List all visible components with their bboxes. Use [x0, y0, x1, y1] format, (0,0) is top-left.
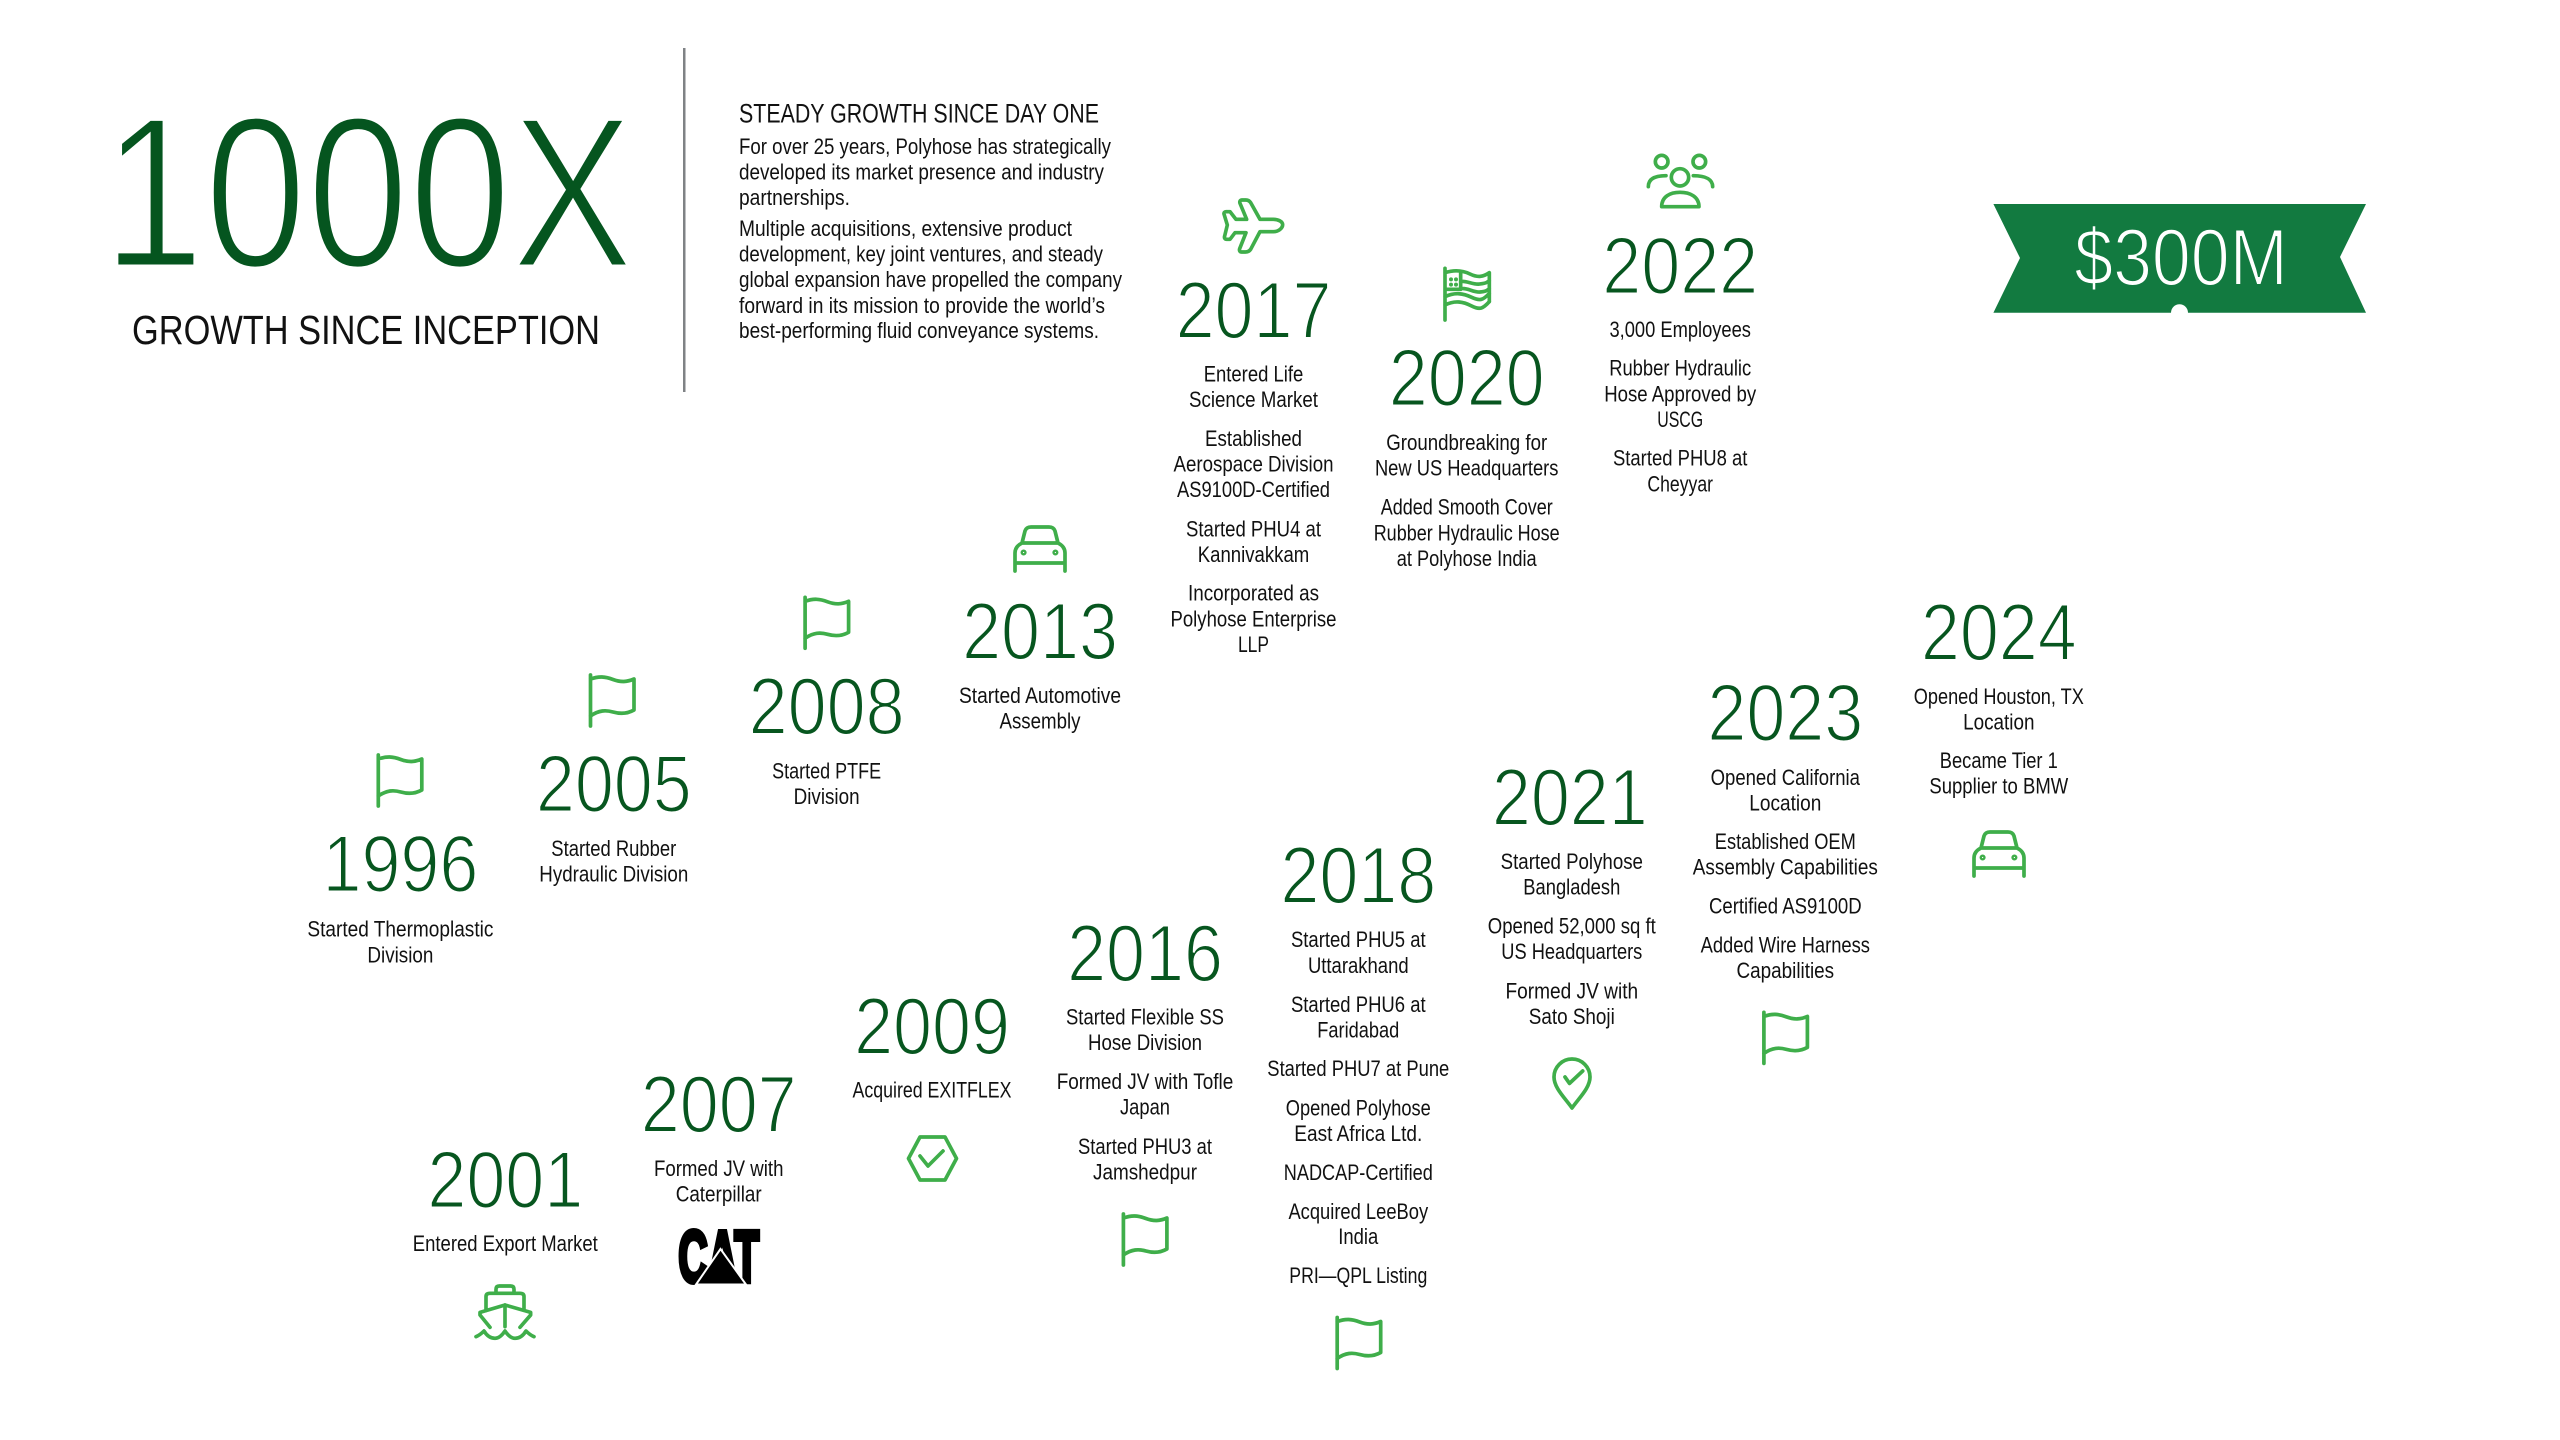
milestone 2023: Established OEM — [1715, 829, 1856, 854]
icon: ship — [476, 1286, 534, 1338]
year 2005: 2005 — [536, 739, 692, 830]
milestone 2024: Became Tier 1 — [1940, 748, 2058, 773]
milestone 2020: Groundbreaking for — [1386, 430, 1547, 455]
milestone 2013 — [959, 527, 1121, 734]
intro text block: development, key joint ventures, and steady — [739, 242, 1103, 267]
milestone 2023: Capabilities — [1736, 958, 1834, 983]
year 2013: 2013 — [962, 586, 1118, 677]
icon: location pin check — [1554, 1059, 1590, 1108]
intro text block — [739, 98, 1122, 343]
icon: US flag — [1445, 268, 1489, 320]
milestone 2013: Assembly — [1000, 709, 1080, 734]
milestone 2022: Cheyyar — [1647, 471, 1713, 496]
year 2024: 2024 — [1921, 587, 2077, 678]
milestone 2022: Started PHU8 at — [1613, 446, 1747, 471]
icon: car — [1974, 832, 2024, 876]
milestone 2016: Started PHU3 at — [1078, 1134, 1212, 1159]
milestone 2018: Acquired LeeBoy — [1288, 1199, 1428, 1224]
milestone 2023: Opened California — [1711, 765, 1861, 790]
milestone 2013: Started Automotive — [959, 683, 1121, 708]
milestone 2018: PRI—QPL Listing — [1289, 1263, 1427, 1288]
milestone 2021: Formed JV with — [1505, 978, 1638, 1003]
milestone 2018: Opened Polyhose — [1286, 1095, 1431, 1120]
milestone 2020: Rubber Hydraulic Hose — [1374, 520, 1560, 545]
vertical divider — [683, 48, 686, 392]
icon: flag — [378, 755, 422, 806]
milestone 2021: Bangladesh — [1523, 874, 1620, 899]
milestone 1996: Division — [367, 942, 433, 967]
year 2020: 2020 — [1389, 333, 1545, 424]
icon: airplane — [1224, 200, 1283, 252]
milestone 2024 — [1914, 587, 2084, 876]
milestone 2018: Started PHU6 at — [1291, 992, 1426, 1017]
milestone 2022: Rubber Hydraulic — [1609, 356, 1751, 381]
year 2008: 2008 — [749, 661, 905, 752]
milestone 2005: Hydraulic Division — [539, 862, 688, 887]
milestone 2021: Opened 52,000 sq ft — [1488, 914, 1656, 939]
milestone 2005: Started Rubber — [551, 836, 676, 861]
milestone 2016: Formed JV with Tofle — [1057, 1069, 1233, 1094]
milestone 2018 — [1267, 830, 1449, 1368]
icon: flag — [1337, 1318, 1381, 1368]
milestone 2007 — [641, 1059, 797, 1298]
intro heading: STEADY GROWTH SINCE DAY ONE — [739, 98, 1099, 128]
milestone 2020: at Polyhose India — [1397, 546, 1537, 571]
intro text block: partnerships. — [739, 185, 850, 210]
milestone 2020 — [1374, 268, 1560, 571]
milestone 2017: Aerospace Division — [1174, 452, 1334, 477]
milestone 2024: Supplier to BMW — [1929, 774, 2068, 799]
milestone 2017: LLP — [1238, 632, 1269, 657]
icon: flag — [590, 675, 634, 726]
intro text block: developed its market presence and industry — [739, 160, 1104, 185]
milestone 2021: Started Polyhose — [1501, 849, 1643, 874]
icon: flag — [1764, 1012, 1807, 1063]
milestone 2022 — [1602, 155, 1758, 496]
milestone 2020: New US Headquarters — [1375, 456, 1558, 481]
icon: hexagon check — [908, 1137, 956, 1180]
milestone 2001: Entered Export Market — [413, 1231, 598, 1256]
milestone 2016: Started Flexible SS — [1066, 1004, 1224, 1029]
year 2017: 2017 — [1176, 265, 1331, 356]
year 1996: 1996 — [322, 819, 478, 910]
icon: people — [1648, 155, 1713, 207]
milestone 2016: Hose Division — [1088, 1030, 1202, 1055]
milestone 2018: Started PHU7 at Pune — [1267, 1056, 1449, 1081]
milestone 2005 — [536, 675, 692, 887]
milestone 2017: Polyhose Enterprise — [1170, 606, 1336, 631]
milestone 1996: Started Thermoplastic — [307, 917, 493, 942]
banner value: $300M — [2074, 213, 2288, 303]
milestone 2024: Location — [1963, 710, 2035, 735]
milestone 2008: Started PTFE — [772, 758, 881, 783]
icon: flag — [1123, 1214, 1167, 1265]
milestone 2009 — [852, 981, 1012, 1180]
milestone 2021: Sato Shoji — [1529, 1004, 1615, 1029]
milestone 2016 — [1057, 908, 1233, 1265]
milestone 2023: Assembly Capabilities — [1693, 855, 1878, 880]
year 2007: 2007 — [641, 1059, 797, 1150]
milestone 2021: US Headquarters — [1501, 939, 1642, 964]
milestone 2024: Opened Houston, TX — [1914, 684, 2084, 709]
year 2001: 2001 — [427, 1135, 583, 1226]
milestone 2022: USCG — [1657, 407, 1703, 432]
milestone 2018: India — [1338, 1224, 1379, 1249]
milestone 2017: Science Market — [1189, 387, 1318, 412]
year 2009: 2009 — [854, 981, 1010, 1072]
logo: CAT: CAT — [678, 1215, 759, 1298]
year 2023: 2023 — [1707, 668, 1863, 759]
intro text block: Multiple acquisitions, extensive product — [739, 216, 1072, 241]
milestone 2017: Established — [1205, 426, 1302, 451]
milestone 2021 — [1488, 752, 1656, 1108]
intro text block: For over 25 years, Polyhose has strategically — [739, 134, 1111, 159]
intro text block: forward in its mission to provide the world’s — [739, 293, 1105, 318]
milestone 2023 — [1693, 668, 1878, 1063]
headline: 1000X: 1000X — [102, 72, 634, 313]
milestone 2017: Started PHU4 at — [1186, 516, 1321, 541]
milestone 2008: Division — [794, 784, 860, 809]
year 2022: 2022 — [1602, 221, 1758, 312]
milestone 2020: Added Smooth Cover — [1381, 495, 1553, 520]
year 2016: 2016 — [1067, 908, 1223, 999]
milestone 2023: Certified AS9100D — [1709, 894, 1862, 919]
milestone 2018: Started PHU5 at — [1291, 927, 1426, 952]
milestone 2016: Jamshedpur — [1093, 1160, 1197, 1185]
milestone 2007: Caterpillar — [676, 1182, 762, 1207]
milestone 2001 — [413, 1135, 598, 1338]
milestone 2022: Hose Approved by — [1604, 381, 1756, 406]
milestone 1996 — [307, 755, 493, 967]
revenue banner — [1993, 204, 2366, 313]
subheading: growth since inception: GROWTH SINCE INCEPTION — [132, 307, 600, 353]
milestone 2018: East Africa Ltd. — [1294, 1121, 1422, 1146]
milestone 2017: AS9100D-Certified — [1177, 477, 1330, 502]
milestone 2017: Entered Life — [1204, 361, 1303, 386]
icon: flag — [805, 597, 849, 648]
intro text block: best-performing fluid conveyance systems. — [739, 318, 1099, 343]
icon: car — [1015, 527, 1065, 571]
milestone 2023: Location — [1749, 791, 1821, 816]
milestone 2009: Acquired EXITFLEX — [852, 1077, 1012, 1102]
milestone 2018: NADCAP-Certified — [1284, 1160, 1433, 1185]
milestone 2017: Incorporated as — [1188, 581, 1319, 606]
year 2018: 2018 — [1280, 830, 1436, 921]
milestone 2017 — [1170, 200, 1336, 657]
milestone 2022: 3,000 Employees — [1609, 317, 1751, 342]
milestone 2018: Faridabad — [1317, 1017, 1399, 1042]
year 2021: 2021 — [1492, 752, 1648, 843]
milestone 2018: Uttarakhand — [1308, 953, 1409, 978]
milestone 2017: Kannivakkam — [1198, 542, 1309, 567]
milestone 2008 — [749, 597, 905, 809]
milestone 2016: Japan — [1120, 1095, 1170, 1120]
intro text block: global expansion have propelled the company — [739, 267, 1122, 292]
milestone 2023: Added Wire Harness — [1701, 932, 1870, 958]
milestone 2007: Formed JV with — [654, 1156, 783, 1181]
